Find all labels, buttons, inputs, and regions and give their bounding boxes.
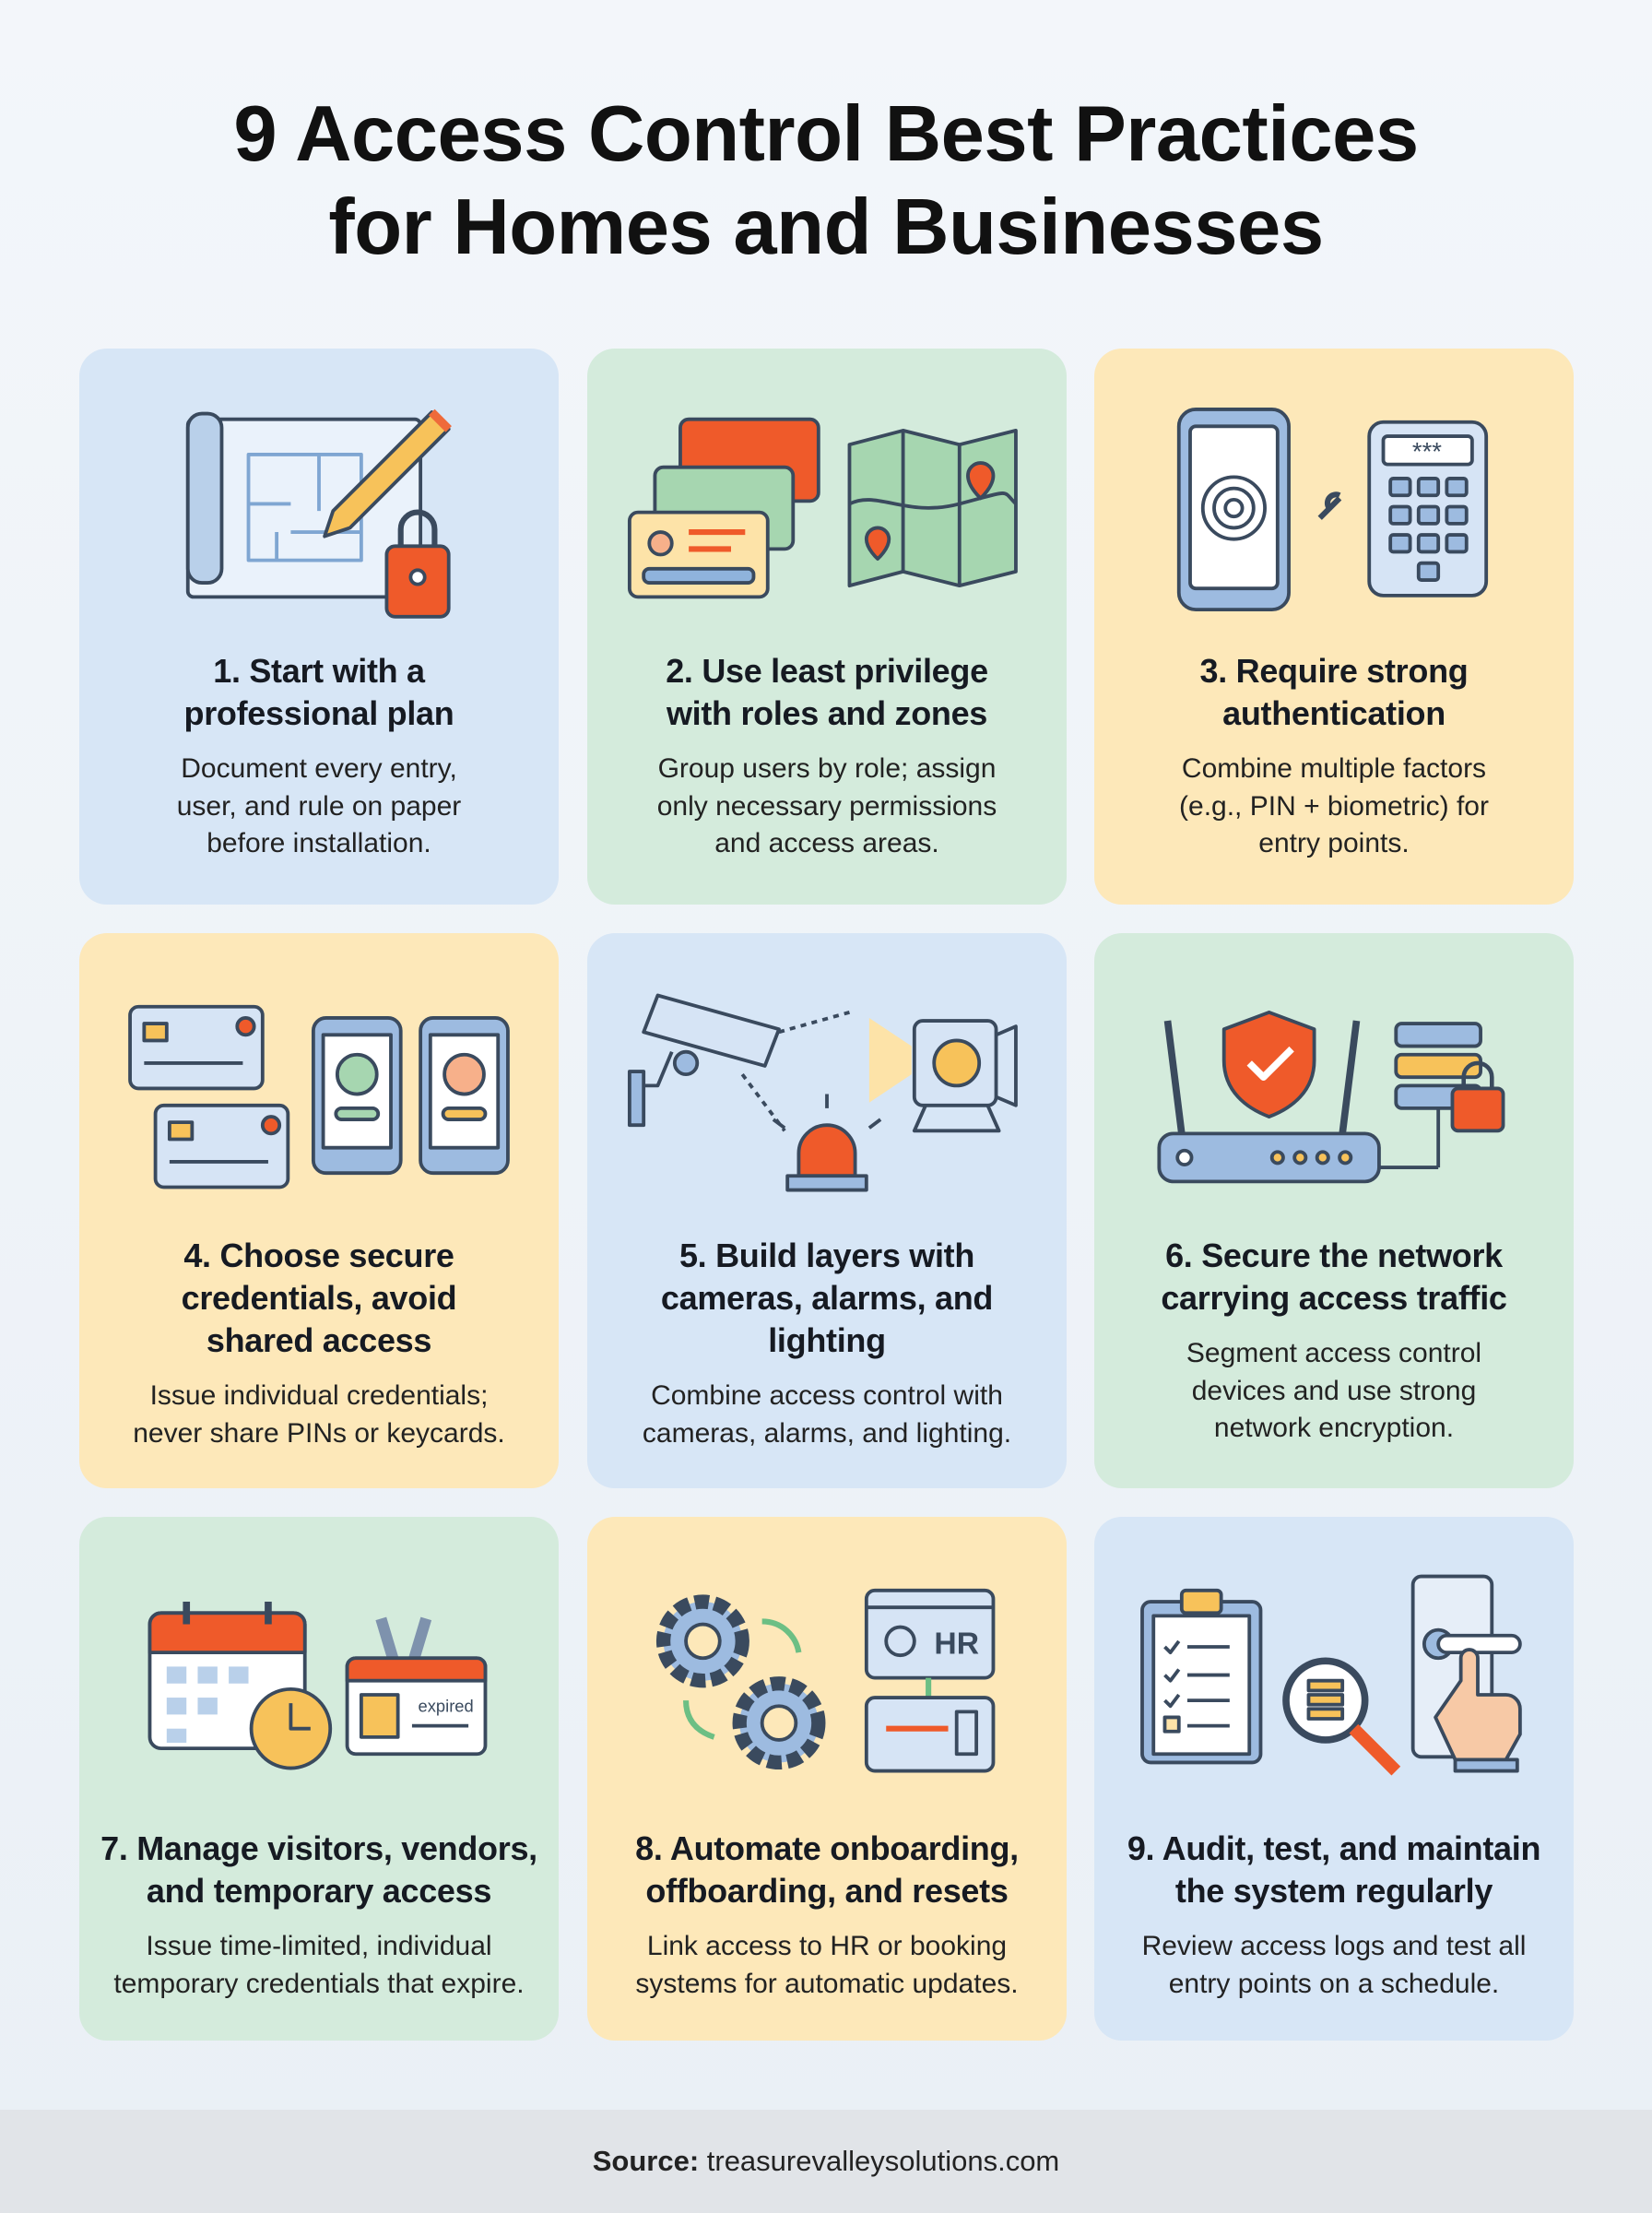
text: cameras, alarms, and xyxy=(661,1279,993,1317)
icon: clipboard magnifier door handle xyxy=(1140,1575,1522,1776)
text: with roles and zones xyxy=(667,694,987,732)
text: 7. Manage visitors, vendors, xyxy=(100,1829,537,1867)
text: entry points on a schedule. xyxy=(1169,1968,1499,1999)
title: 9 Access Control Best Practices xyxy=(233,90,1419,178)
text: 4. Choose secure xyxy=(183,1237,454,1274)
text: entry points. xyxy=(1258,828,1410,858)
text: devices and use strong xyxy=(1192,1376,1476,1405)
text xyxy=(1161,1237,1507,1443)
text: offboarding, and resets xyxy=(645,1872,1009,1910)
text xyxy=(133,1237,505,1448)
text: Group users by role; assign xyxy=(658,753,996,784)
text: user, and rule on paper xyxy=(177,791,461,821)
panel: 2 least privilege xyxy=(587,349,1067,905)
panel: 1 professional plan xyxy=(79,349,559,905)
panel: 8 automate xyxy=(587,1517,1067,2041)
text: before installation. xyxy=(206,828,431,858)
text xyxy=(100,1829,537,1999)
text: 9. Audit, test, and maintain xyxy=(1127,1829,1540,1867)
text: temporary credentials that expire. xyxy=(113,1968,525,1999)
text xyxy=(177,652,461,858)
text: (e.g., PIN + biometric) for xyxy=(1179,791,1489,821)
icon: phone fingerprint and keypad xyxy=(1176,408,1488,611)
text: 5. Build layers with xyxy=(679,1237,974,1274)
icon: router shield server xyxy=(1157,1011,1504,1184)
text: 8. Automate onboarding, xyxy=(635,1829,1019,1867)
text xyxy=(1179,652,1489,858)
text: cameras, alarms, and lighting. xyxy=(643,1418,1011,1448)
text: the system regularly xyxy=(1175,1872,1493,1910)
text xyxy=(657,652,997,858)
text: network encryption. xyxy=(1214,1413,1454,1443)
text: and temporary access xyxy=(147,1872,491,1910)
title xyxy=(233,90,1419,271)
icon: gears and HR window: HR xyxy=(934,1627,979,1662)
footer: source: Source: treasurevalleysolutions.com xyxy=(593,2145,1059,2177)
icon: camera alarm light xyxy=(627,994,1018,1191)
text: 2. Use least privilege xyxy=(666,652,988,690)
text: shared access xyxy=(206,1321,431,1359)
icon: calendar clock badge: expired xyxy=(419,1696,474,1715)
text: Segment access control xyxy=(1186,1338,1481,1368)
text: 6. Secure the network xyxy=(1165,1237,1503,1274)
text: and access areas. xyxy=(714,828,939,858)
panel: 4 secure credentials xyxy=(79,933,559,1488)
text xyxy=(635,1829,1019,1999)
text xyxy=(1127,1829,1540,1999)
text: Combine multiple factors xyxy=(1182,753,1486,784)
text: 1. Start with a xyxy=(213,652,425,690)
text: professional plan xyxy=(184,694,454,732)
panel: 3 strong authentication xyxy=(1094,349,1574,905)
icon: id cards and map xyxy=(627,417,1018,599)
text: Link access to HR or booking xyxy=(647,1931,1007,1961)
text: systems for automatic updates. xyxy=(635,1968,1019,1999)
text: Document every entry, xyxy=(181,753,457,784)
text: carrying access traffic xyxy=(1161,1279,1507,1317)
text: authentication xyxy=(1222,694,1446,732)
panel: 9 audit xyxy=(1094,1517,1574,2041)
text: 3. Require strong xyxy=(1200,652,1468,690)
title: for Homes and Businesses xyxy=(328,183,1324,271)
text: Issue individual credentials; xyxy=(150,1380,488,1411)
icon: gears and HR window xyxy=(656,1588,996,1772)
panel: 6 network xyxy=(1094,933,1574,1488)
icon: keycards and phones xyxy=(128,1005,510,1189)
icon: blueprint with pencil and lock xyxy=(186,409,452,619)
text: never share PINs or keycards. xyxy=(133,1418,505,1448)
panel: 5 layers xyxy=(587,933,1067,1488)
text: Issue time-limited, individual xyxy=(146,1931,492,1961)
text: credentials, avoid xyxy=(182,1279,456,1317)
panel: 7 visitors xyxy=(79,1517,559,2041)
text: Review access logs and test all xyxy=(1142,1931,1526,1961)
text xyxy=(643,1237,1011,1448)
icon: calendar clock badge xyxy=(148,1602,487,1770)
text: only necessary permissions xyxy=(657,791,997,821)
text: Combine access control with xyxy=(651,1380,1003,1411)
text: lighting xyxy=(768,1321,886,1359)
footer: source xyxy=(0,2110,1652,2213)
icon: phone fingerprint and keypad: *** xyxy=(1412,437,1442,466)
